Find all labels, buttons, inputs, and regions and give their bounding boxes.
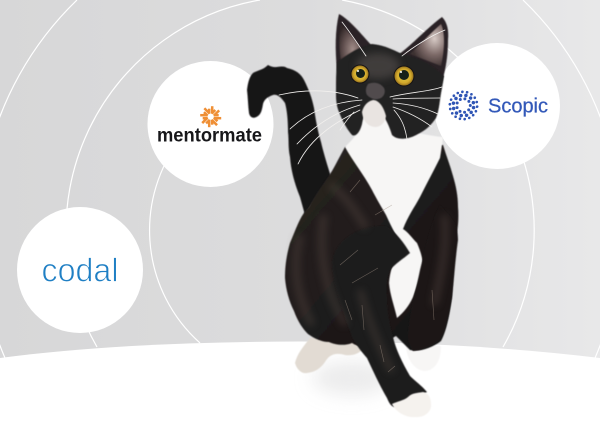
cat head highlight xyxy=(356,53,400,79)
cat right eye xyxy=(394,66,414,86)
cat muzzle xyxy=(362,100,386,127)
cat chest white xyxy=(345,108,443,318)
badge: codal xyxy=(17,207,143,333)
cat hidden white paw xyxy=(406,345,441,371)
logo text: codal: codal xyxy=(42,252,118,288)
floor shadow xyxy=(312,361,392,395)
white floor xyxy=(0,342,600,425)
cat right ear inner xyxy=(410,24,444,66)
cat raised leg xyxy=(408,205,458,351)
cat tail xyxy=(247,65,331,215)
cat fur highlights xyxy=(296,185,445,372)
cat xyxy=(247,14,458,417)
cat front paw xyxy=(392,392,431,417)
cat body xyxy=(285,145,458,351)
badge: Scopic xyxy=(434,43,560,169)
cat fur hairs xyxy=(340,180,434,372)
logo text: Scopic: Scopic xyxy=(488,96,548,118)
cat whiskers xyxy=(279,22,445,164)
cat left ear inner xyxy=(339,24,366,70)
cat rear paw xyxy=(295,335,362,373)
cat left eye xyxy=(351,65,369,83)
cat head xyxy=(336,44,444,139)
cat extended front leg xyxy=(332,226,427,407)
icon: dotted ring xyxy=(449,91,478,120)
badge: mentormate xyxy=(148,61,274,187)
logo text: mentormate: mentormate xyxy=(157,126,262,146)
cat left ear xyxy=(336,14,372,82)
icon: orange burst xyxy=(200,106,221,127)
cat right ear xyxy=(398,17,448,82)
cat nose xyxy=(366,83,385,99)
